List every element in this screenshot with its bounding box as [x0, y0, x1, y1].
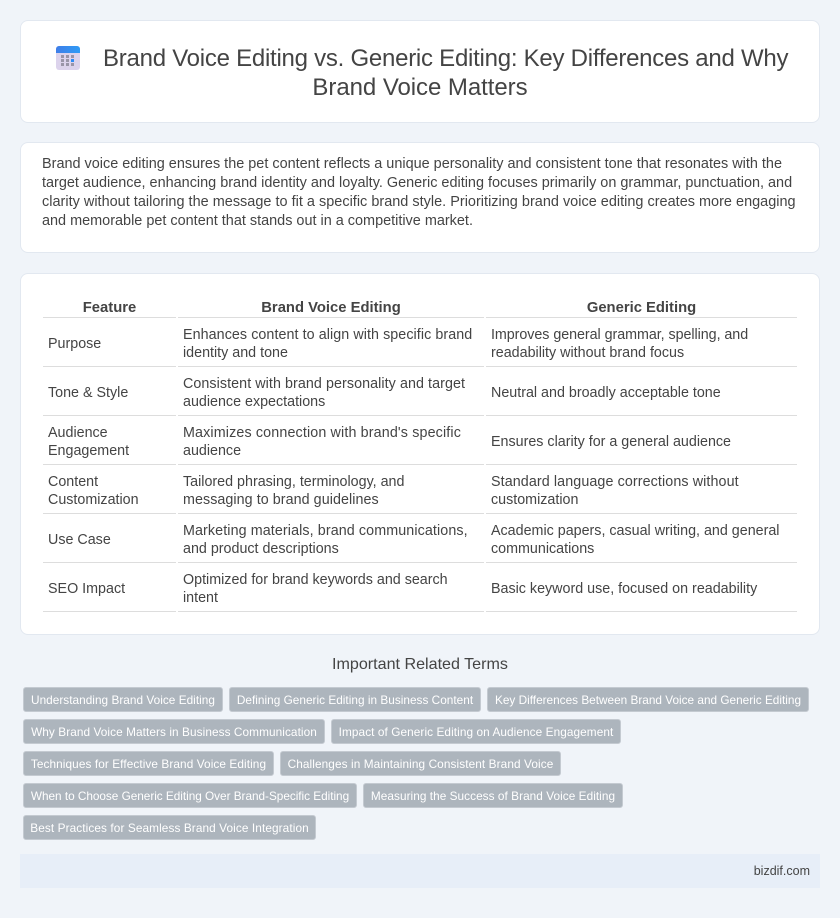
Tone: brand voice [183, 376, 465, 410]
row: Audience Engagement: Engagement [48, 443, 129, 459]
related terms heading: Important Related Terms [332, 655, 508, 673]
title [103, 45, 788, 101]
tag [487, 687, 809, 712]
Customization: brand voice: Tailored phrasing, terminology, and [183, 474, 404, 490]
intro panel [20, 142, 820, 253]
tag [363, 783, 623, 808]
Use Case: brand voice: Marketing materials, brand communications, [183, 523, 468, 539]
title: Brand Voice Matters [312, 74, 528, 101]
tag [23, 687, 223, 712]
tag: When to Choose Generic Editing Over Brand-Specific Editing [31, 789, 349, 803]
tag [23, 783, 357, 808]
comparison table panel [20, 273, 820, 635]
tag [331, 719, 621, 744]
Customization: brand voice: messaging to brand guidelines [183, 492, 379, 508]
intro text [42, 156, 796, 229]
row: SEO Impact: SEO Impact [48, 581, 125, 597]
Customization: generic: customization [491, 492, 578, 508]
Audience: brand voice: Maximizes connection with brand's specific [183, 425, 461, 441]
tag: Techniques for Effective Brand Voice Editing [31, 757, 266, 771]
Use Case: generic: communications [491, 541, 594, 557]
row: Content Customization: Content [48, 474, 98, 490]
tag [23, 751, 274, 776]
intro text: and memorable pet content that stands out in a competitive market. [42, 213, 473, 229]
tag [280, 751, 561, 776]
tag [23, 719, 325, 744]
Use Case: generic [491, 523, 779, 557]
table header: Generic Editing: Generic Editing [587, 300, 696, 316]
intro text: target audience, enhancing brand identity and loyalty. Generic editing focuses primarily on grammar, punctuation, and [42, 175, 792, 191]
tag: Why Brand Voice Matters in Business Communication [31, 725, 317, 739]
row: Use Case: Use Case [48, 532, 111, 548]
tag: Key Differences Between Brand Voice and Generic Editing [495, 693, 801, 707]
Audience: brand voice: audience [183, 443, 241, 459]
row: Content Customization [48, 474, 139, 508]
tag: Measuring the Success of Brand Voice Editing [371, 789, 615, 803]
title: Brand Voice Editing vs. Generic Editing: Key Differences and Why [103, 45, 788, 72]
row: Audience Engagement [48, 425, 129, 459]
intro text: clarity without tailoring the message to fit a specific brand style. Prioritizing brand voice editing creates more engaging [42, 194, 796, 210]
Customization: generic [491, 474, 739, 508]
intro text: Brand voice editing ensures the pet content reflects a unique personality and consistent tone that resonates with the [42, 156, 782, 172]
SEO: brand voice: Optimized for brand keywords and search [183, 572, 448, 588]
Use Case: generic: Academic papers, casual writing, and general [491, 523, 779, 539]
Purpose: generic: readability without brand focus [491, 345, 684, 361]
Purpose: brand voice: Enhances content to align with specific brand [183, 327, 472, 343]
SEO: brand voice: intent [183, 590, 218, 606]
Use Case: brand voice: and product descriptions [183, 541, 339, 557]
tag [23, 815, 316, 840]
table header: Feature: Feature [83, 300, 136, 316]
row: Purpose: Purpose [48, 336, 101, 352]
footer bar [20, 854, 820, 888]
row: Tone & Style: Tone & Style [48, 385, 128, 401]
Purpose: brand voice: identity and tone [183, 345, 288, 361]
Tone: brand voice: audience expectations [183, 394, 325, 410]
Purpose: brand voice [183, 327, 472, 361]
tag: Challenges in Maintaining Consistent Brand Voice [288, 757, 553, 771]
Audience: brand voice [183, 425, 461, 459]
Purpose: generic [491, 327, 748, 361]
row: Audience Engagement: Audience [48, 425, 108, 441]
Customization: brand voice [183, 474, 404, 508]
Tone: brand voice: Consistent with brand personality and target [183, 376, 465, 392]
Purpose: generic: Improves general grammar, spelling, and [491, 327, 748, 343]
tag: Understanding Brand Voice Editing [31, 693, 215, 707]
table header: Brand Voice Editing: Brand Voice Editing [261, 300, 401, 316]
tag: Defining Generic Editing in Business Content [237, 693, 473, 707]
SEO: generic: Basic keyword use, focused on readability [491, 581, 757, 597]
Customization: generic: Standard language corrections without [491, 474, 739, 490]
Audience: generic: Ensures clarity for a general audience [491, 434, 731, 450]
Use Case: brand voice [183, 523, 468, 557]
tag [229, 687, 481, 712]
tag: Best Practices for Seamless Brand Voice Integration [30, 821, 309, 835]
footer site name: bizdif.com [754, 864, 810, 878]
header panel [20, 20, 820, 123]
Tone: generic: Neutral and broadly acceptable tone [491, 385, 721, 401]
icon: calendar [56, 46, 80, 70]
row: Content Customization: Customization [48, 492, 139, 508]
tag: Impact of Generic Editing on Audience Engagement [339, 725, 613, 739]
SEO: brand voice [183, 572, 448, 606]
